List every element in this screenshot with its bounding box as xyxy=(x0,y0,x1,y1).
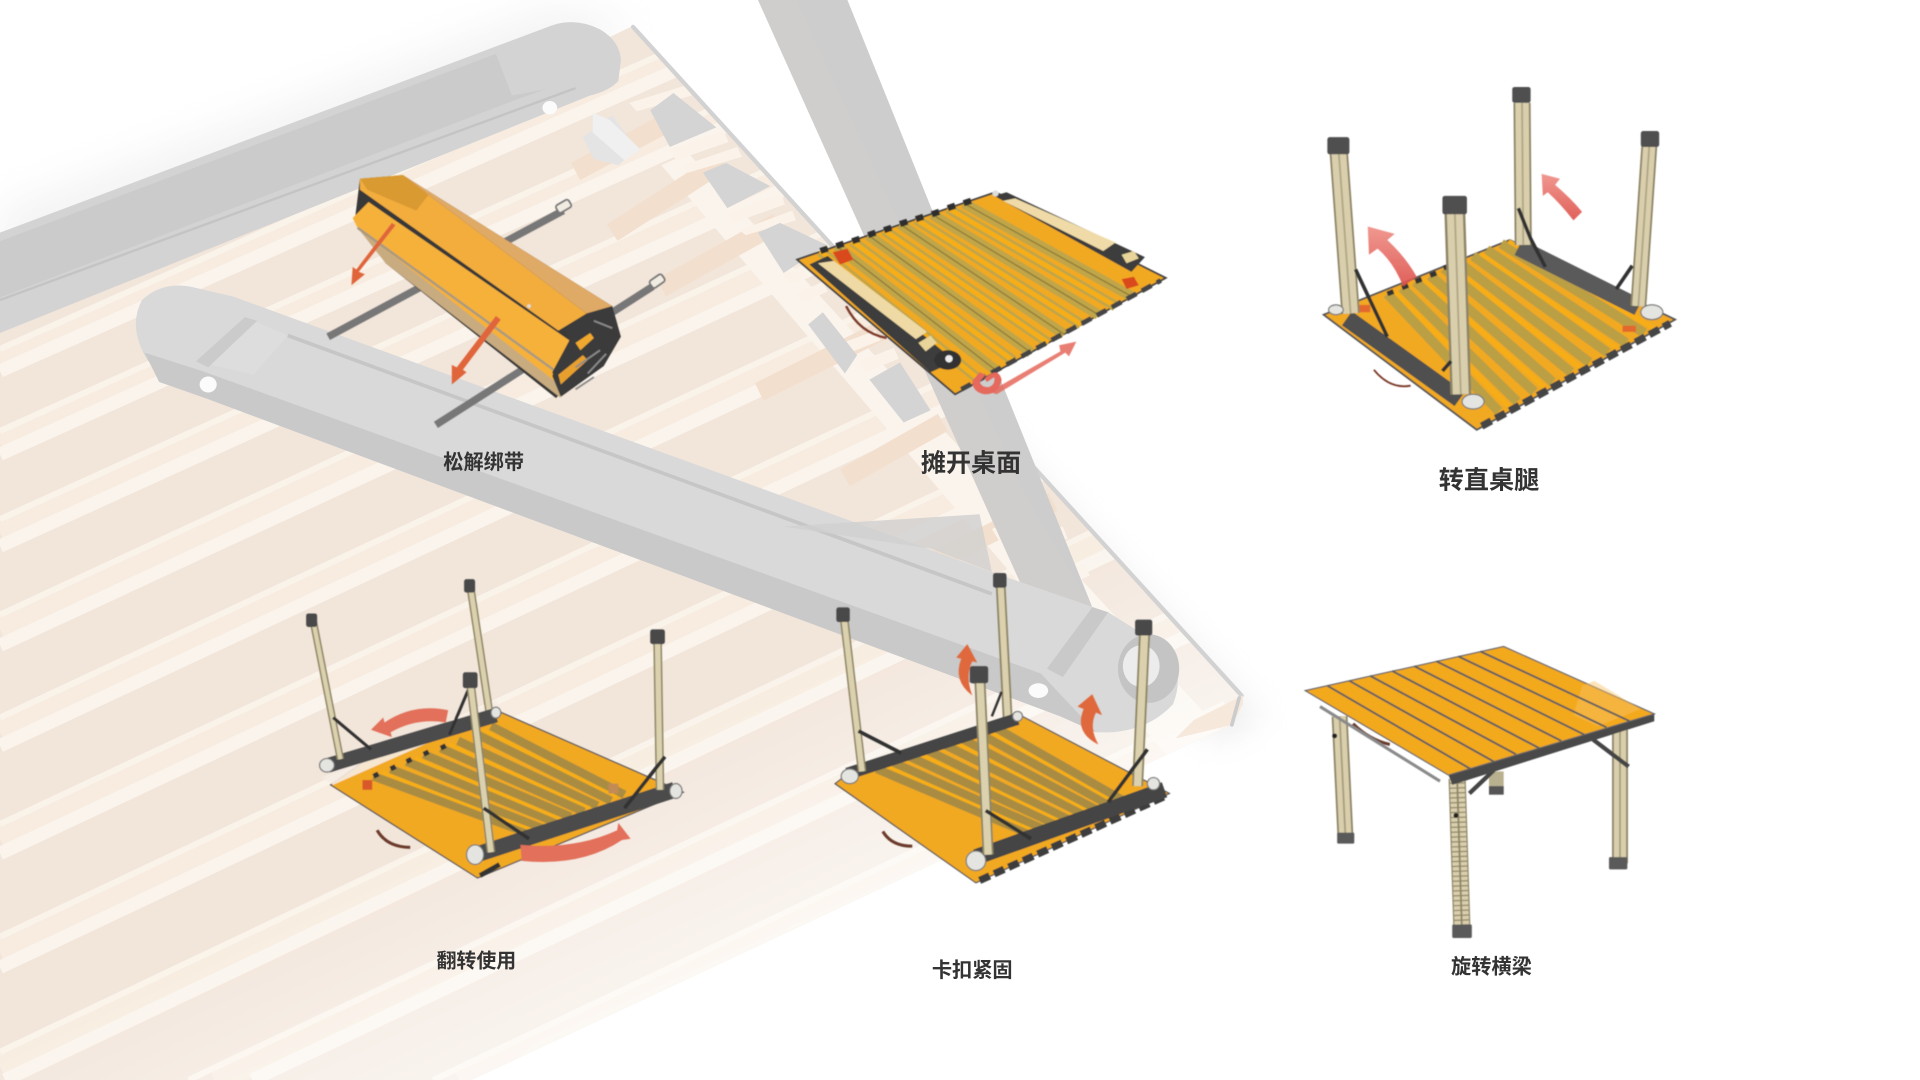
leg right xyxy=(1616,131,1659,306)
beams xyxy=(1347,247,1638,399)
arrow xyxy=(972,342,1076,394)
soft shadow around frame xyxy=(0,6,1261,747)
handle xyxy=(846,306,887,338)
board xyxy=(1324,240,1675,430)
tan rods xyxy=(576,122,1053,563)
table underside edge xyxy=(1449,714,1654,785)
step 1: rolled table 松解绑带 xyxy=(328,175,666,425)
ribs xyxy=(373,726,624,876)
leg left xyxy=(1327,137,1387,337)
frame bar: bottom with ring end xyxy=(136,285,1179,732)
ribs xyxy=(877,725,1166,880)
back leg xyxy=(464,579,490,715)
braces and handle xyxy=(1320,707,1629,793)
beam left xyxy=(809,249,961,372)
step 2: flat table 摊开桌面 xyxy=(797,190,1166,394)
back leg xyxy=(993,573,1008,720)
label: 转直桌腿: 转直桌腿 xyxy=(1439,467,1539,495)
table top xyxy=(1305,647,1654,775)
gap along beam xyxy=(322,700,502,785)
label: 松解绑带: 松解绑带 xyxy=(443,451,524,474)
arrows xyxy=(1368,174,1582,287)
right leg xyxy=(1609,730,1627,869)
rolled slabs xyxy=(353,175,621,398)
arrows xyxy=(351,223,501,384)
front leg xyxy=(1452,779,1472,938)
label: 旋转横梁: 旋转横梁 xyxy=(1451,955,1532,978)
board xyxy=(797,192,1166,394)
left leg xyxy=(1337,716,1354,844)
white fade at lower right edge xyxy=(514,612,1920,1080)
small white clip xyxy=(583,113,640,165)
arrows xyxy=(371,708,631,862)
board xyxy=(331,710,683,878)
step 5: clip 卡扣紧固 xyxy=(835,573,1169,883)
step 6: assembled table 旋转横梁 xyxy=(1305,647,1654,938)
legs and braces xyxy=(836,607,1152,855)
leg back xyxy=(1512,87,1545,267)
pale fade over lower planks xyxy=(113,596,1239,1080)
ribs xyxy=(820,201,1161,389)
back leg stub xyxy=(1489,771,1504,795)
ribs xyxy=(1387,241,1670,426)
beams xyxy=(328,715,675,853)
knobs xyxy=(1329,305,1663,409)
label: 卡扣紧固: 卡扣紧固 xyxy=(932,959,1013,982)
wood slats xyxy=(0,27,1238,1080)
knobs xyxy=(320,707,682,864)
legs and braces xyxy=(306,613,665,852)
beams xyxy=(847,719,1164,857)
frame bar: top xyxy=(0,22,621,333)
background: faded bed frame and wood slats xyxy=(0,0,1249,1080)
knobs xyxy=(841,711,1160,871)
frame bar: diagonal xyxy=(758,0,1092,661)
label: 摊开桌面: 摊开桌面 xyxy=(921,449,1021,477)
clips xyxy=(362,780,618,793)
cross slat tabs xyxy=(629,86,1090,588)
beam right xyxy=(992,190,1145,289)
step 3: legs up 转直桌腿 xyxy=(1324,87,1675,430)
grey blocks xyxy=(650,93,931,422)
cream cross band beside rail xyxy=(661,153,1224,765)
step 4: flip 翻转使用 xyxy=(306,579,683,878)
leg front xyxy=(1442,196,1467,394)
label: 翻转使用: 翻转使用 xyxy=(436,949,516,972)
straps xyxy=(328,199,666,425)
side rail xyxy=(633,27,1243,738)
arrows xyxy=(956,644,1102,744)
board xyxy=(835,714,1169,883)
